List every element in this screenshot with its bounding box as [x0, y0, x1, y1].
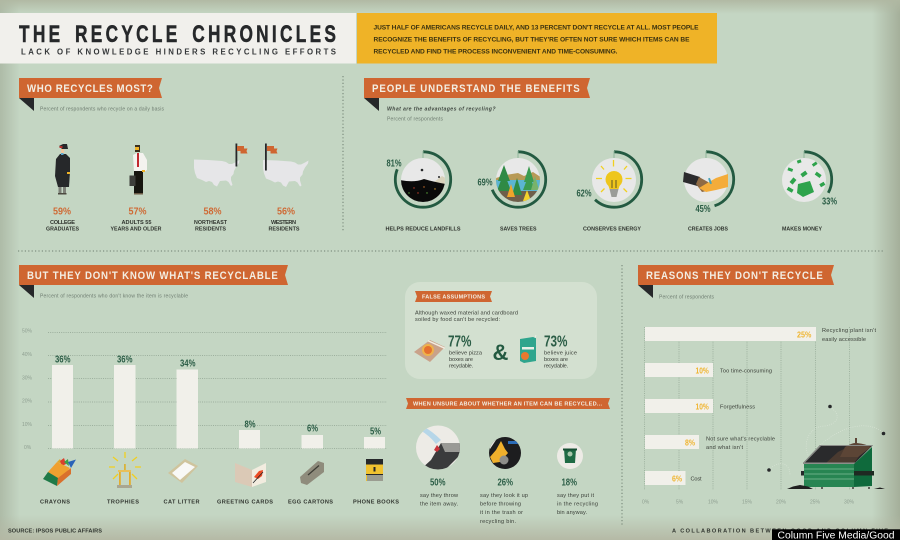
note: Percent of respondents who recycle on a daily basis — [40, 106, 164, 112]
text — [449, 350, 483, 370]
stat: 77%: 77% — [448, 334, 472, 350]
stats: 59% — [53, 206, 71, 218]
ring: trees 69%: 69% — [478, 178, 493, 188]
bar chart — [642, 327, 876, 506]
item labels: EGG CARTONS — [288, 500, 333, 506]
reason labels: Not sure what's recyclable — [706, 436, 775, 442]
ring: landfills 81%: 81% — [386, 158, 402, 170]
icon: phone book — [366, 459, 383, 481]
banner: FALSE ASSUMPTIONS — [422, 294, 485, 300]
bar values: 5% — [370, 426, 381, 438]
labels: RESIDENTS — [268, 226, 300, 232]
banner: WHEN UNSURE ABOUT WHETHER AN ITEM CAN BE RECYCLED... — [413, 402, 602, 408]
text: believe juice — [544, 350, 577, 356]
text — [415, 310, 518, 323]
heading banner: WHO RECYCLES MOST? — [27, 84, 153, 95]
text: boxes are — [544, 357, 568, 363]
text — [557, 493, 598, 516]
values: 25% — [797, 330, 812, 340]
stat: 26% — [498, 478, 513, 488]
axis labels: 25% — [810, 500, 821, 506]
heading banner — [364, 78, 590, 111]
text — [420, 493, 459, 508]
icon: juice box — [520, 335, 536, 363]
labels: RESIDENTS — [195, 226, 226, 232]
labels: YEARS AND OLDER — [110, 226, 162, 232]
stats: 57% — [128, 206, 146, 218]
labels: ADULTS 55 — [122, 220, 152, 226]
bar chart — [22, 328, 387, 451]
axis labels: 50% — [22, 328, 33, 334]
bars — [645, 327, 816, 485]
icon: egg carton — [300, 461, 324, 485]
ring: energy 62%: 62% — [576, 188, 592, 200]
banner — [406, 398, 610, 409]
icon: pizza box — [414, 340, 445, 362]
intro panel — [357, 13, 717, 64]
labels: WESTERN — [271, 220, 296, 226]
item labels: TROPHIES — [107, 500, 139, 506]
ring: energy 62% — [576, 151, 642, 207]
reason labels: Forgetfulness — [720, 404, 755, 410]
item labels: CRAYONS — [40, 500, 70, 506]
stat: 18% — [562, 478, 577, 488]
credit: A COLLABORATION BETWEEN GOOD AND COLUMN FIVE — [672, 528, 888, 534]
icon: greeting card — [235, 463, 266, 487]
axis labels: 20% — [22, 398, 33, 404]
values: 10% — [696, 402, 709, 412]
icon: throw away — [416, 426, 460, 470]
note: Percent of respondents — [387, 116, 444, 122]
stat: 50% — [430, 478, 446, 488]
axis labels: 30% — [844, 500, 855, 506]
ring: jobs 45% — [678, 151, 734, 215]
axis labels — [22, 328, 33, 451]
heading banner: PEOPLE UNDERSTAND THE BENEFITS — [372, 84, 580, 95]
item labels: GREETING CARDS — [217, 500, 273, 506]
ring: jobs 45%: 45% — [696, 204, 711, 215]
text: Although waxed material and cardboard — [415, 310, 518, 316]
ring: trees 69% — [478, 151, 546, 207]
text: it in the trash or — [480, 510, 523, 516]
ring labels: CONSERVES ENERGY — [583, 226, 641, 232]
values: 6% — [672, 474, 682, 484]
stats: 56% — [277, 206, 295, 218]
panel: when unsure — [406, 398, 610, 525]
ring labels: CREATES JOBS — [688, 226, 728, 232]
bars — [52, 365, 385, 448]
stat: 73%: 73% — [544, 334, 568, 350]
icon: northeast map — [194, 144, 248, 186]
text: recyclable. — [544, 364, 568, 370]
ring: money 33% — [776, 151, 837, 208]
stats: 58% — [204, 206, 222, 218]
axis labels: 5% — [676, 500, 684, 506]
panel: who recycles most — [19, 78, 308, 232]
ampersand: & — [493, 340, 509, 365]
heading banner: BUT THEY DON'T KNOW WHAT'S RECYCLABLE — [27, 271, 278, 282]
axis labels: 0% — [642, 500, 650, 506]
reason labels: Recycling plant isn't — [822, 328, 876, 334]
axis labels: 15% — [742, 500, 753, 506]
bar values: 36% — [117, 354, 133, 366]
ring: landfills 81% — [386, 151, 451, 207]
text: the item away. — [420, 502, 458, 508]
icon: crayons — [43, 458, 76, 486]
bar values: 6% — [307, 424, 318, 434]
item labels: CAT LITTER — [164, 500, 200, 506]
panel: reasons they don't recycle — [638, 265, 885, 506]
icon: western map — [263, 144, 308, 187]
axis labels: 10% — [708, 500, 719, 506]
bar values — [55, 354, 381, 438]
ring labels — [386, 226, 822, 232]
text: boxes are — [449, 357, 473, 363]
source: SOURCE: IPSOS PUBLIC AFFAIRS — [8, 528, 102, 534]
axis labels: 10% — [22, 422, 33, 428]
icon: recycling bin — [557, 443, 583, 469]
bar values: 36% — [55, 354, 71, 366]
axis labels: 20% — [776, 500, 787, 506]
text: say they look it up — [480, 493, 528, 499]
note: Percent of respondents — [659, 294, 714, 300]
reason labels: easily accessible — [822, 337, 866, 343]
values — [672, 330, 812, 484]
stats — [53, 206, 295, 218]
text: soiled by food can't be recycled: — [415, 317, 500, 323]
subtitle: LACK OF KNOWLEDGE HINDERS RECYCLING EFFORTS — [21, 47, 336, 56]
labels: GRADUATES — [46, 226, 79, 232]
heading banner — [19, 78, 162, 111]
intro panel: JUST HALF OF AMERICANS RECYCLE DAILY, AND 13 PERCENT DON'T RECYCLE AT ALL. MOST PEOPLE — [374, 24, 699, 32]
intro panel: RECYCLED AND FIND THE PROCESS INCONVENIENT AND TIME-CONSUMING. — [374, 48, 618, 56]
text: recycling bin. — [480, 519, 516, 525]
axis labels: 40% — [22, 352, 33, 358]
ring labels: SAVES TREES — [500, 226, 537, 232]
text: before throwing — [480, 502, 521, 508]
text — [480, 493, 528, 525]
icon: dumpster — [767, 405, 885, 489]
icon: look it up — [489, 437, 522, 469]
note: Percent of respondents who don't know the item is recyclable — [40, 294, 188, 300]
ring: money 33%: 33% — [822, 196, 837, 208]
panel: false assumptions — [405, 282, 597, 379]
text: bin anyway. — [557, 510, 587, 516]
text: recyclable. — [449, 364, 473, 370]
values: 10% — [696, 366, 709, 376]
icon: graduate — [55, 144, 70, 194]
heading banner — [19, 265, 288, 298]
labels: NORTHEAST — [194, 220, 228, 226]
item labels: PHONE BOOKS — [353, 500, 399, 506]
intro panel: RECOGNIZE THE BENEFITS OF RECYCLING, BUT THEY'RE OFTEN NOT SURE WHICH ITEMS CAN BE — [374, 36, 690, 44]
reason labels — [690, 328, 876, 482]
icon: cat litter — [168, 459, 198, 483]
title block — [0, 13, 356, 64]
text: believe pizza — [449, 350, 483, 356]
icon: older adult — [130, 145, 147, 194]
heading banner — [638, 265, 834, 298]
item labels — [40, 500, 399, 506]
axis labels — [642, 500, 855, 506]
bar values: 8% — [244, 420, 256, 430]
ring labels: HELPS REDUCE LANDFILLS — [386, 226, 461, 232]
text: say they throw — [420, 493, 459, 499]
panel: don't know what's recyclable — [19, 265, 399, 506]
reason labels: Cost — [690, 476, 702, 482]
ring labels: MAKES MONEY — [782, 226, 822, 232]
reason labels: Too time-consuming — [720, 368, 772, 374]
axis labels: 0% — [24, 445, 32, 451]
panel: people understand the benefits — [364, 78, 837, 232]
heading banner: REASONS THEY DON'T RECYCLE — [646, 271, 823, 282]
text — [544, 350, 577, 370]
bar values: 34% — [180, 358, 196, 370]
title: THE RECYCLE CHRONICLES — [19, 21, 339, 48]
text: in the recycling — [557, 502, 598, 508]
question: What are the advantages of recycling? — [387, 106, 496, 112]
text: say they put it — [557, 493, 594, 499]
axis labels: 30% — [22, 376, 33, 382]
labels: COLLEGE — [50, 220, 75, 226]
reason labels: and what isn't — [706, 445, 743, 451]
values: 8% — [685, 438, 695, 448]
banner — [415, 291, 492, 302]
labels — [46, 220, 300, 232]
icon: trophy — [109, 452, 141, 488]
